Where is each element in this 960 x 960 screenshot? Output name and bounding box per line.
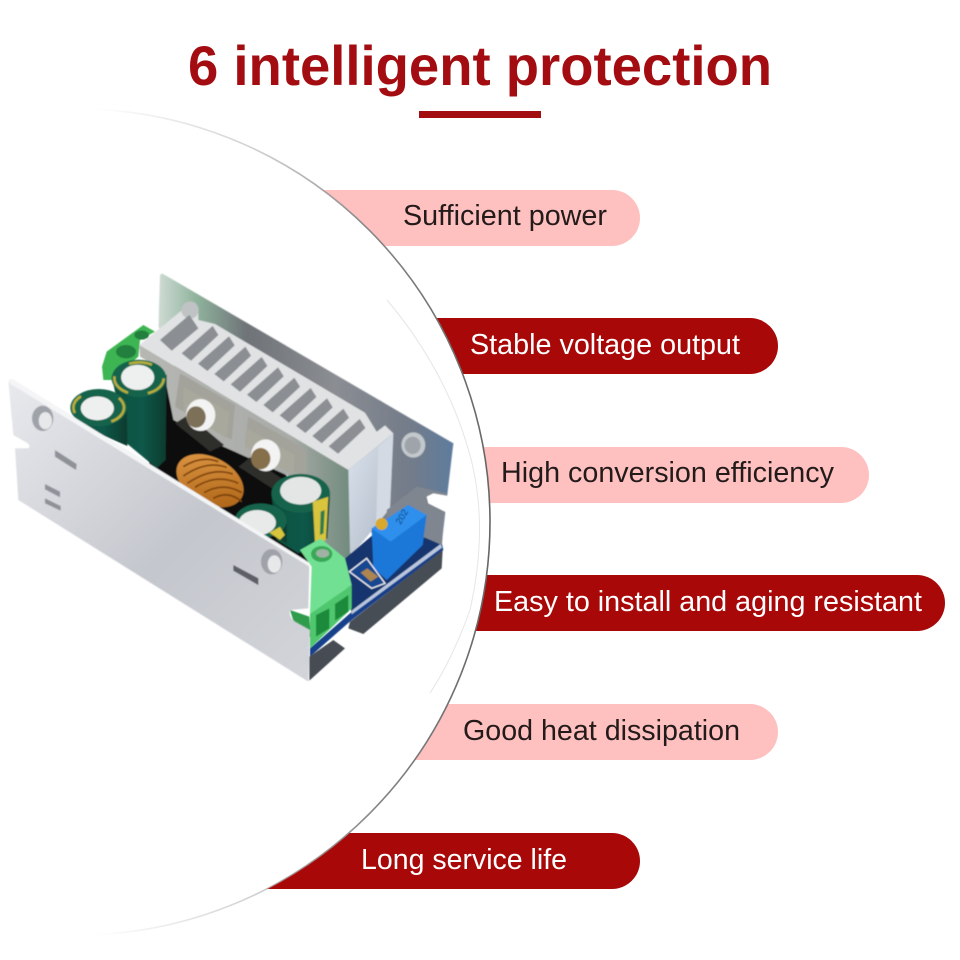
pill: long service life	[220, 833, 640, 889]
title underline	[419, 111, 541, 118]
capacitor rear short	[70, 389, 127, 446]
white circle panel	[0, 109, 490, 935]
interior board shadow	[133, 360, 367, 580]
plate mounting hole	[401, 432, 425, 458]
mounting holes and slots	[32, 406, 282, 585]
rear terminal block	[102, 325, 155, 380]
capacitor front short	[235, 503, 287, 543]
front plate	[8, 379, 310, 682]
pill: good heat dissipation	[350, 704, 778, 760]
pill: high conversion efficiency	[420, 447, 869, 503]
pill: stable voltage output	[380, 318, 778, 374]
heat sink slots	[160, 315, 365, 454]
transistor right	[238, 417, 307, 488]
small capacitor chip	[349, 558, 385, 588]
heat sink	[139, 301, 393, 567]
pill: long service life: Long service life	[361, 844, 567, 876]
product photo: DC-DC converter module	[8, 274, 453, 682]
transistor left	[175, 373, 235, 452]
pill: stable voltage output: Stable voltage output	[470, 329, 740, 361]
pill: easy to install and aging resistant: Easy to install and aging resistant	[494, 586, 922, 618]
back plate	[158, 274, 453, 547]
pill: sufficient power	[250, 190, 640, 246]
pill: good heat dissipation: Good heat dissipation	[463, 715, 740, 747]
pill: easy to install and aging resistant	[420, 575, 945, 631]
feature pills	[220, 190, 945, 889]
capacitor rear tall	[112, 360, 167, 468]
title: 6 intelligent protection	[188, 34, 772, 97]
front terminal block	[290, 538, 352, 648]
circuit board	[309, 487, 452, 681]
trimmer potentiometer	[372, 505, 427, 580]
inductor coil	[167, 443, 253, 518]
capacitor front tall	[271, 474, 330, 553]
pill: high conversion efficiency: High conversion efficiency	[501, 457, 834, 489]
pill: sufficient power: Sufficient power	[403, 200, 607, 232]
trimmer potentiometer: 202	[394, 508, 410, 526]
